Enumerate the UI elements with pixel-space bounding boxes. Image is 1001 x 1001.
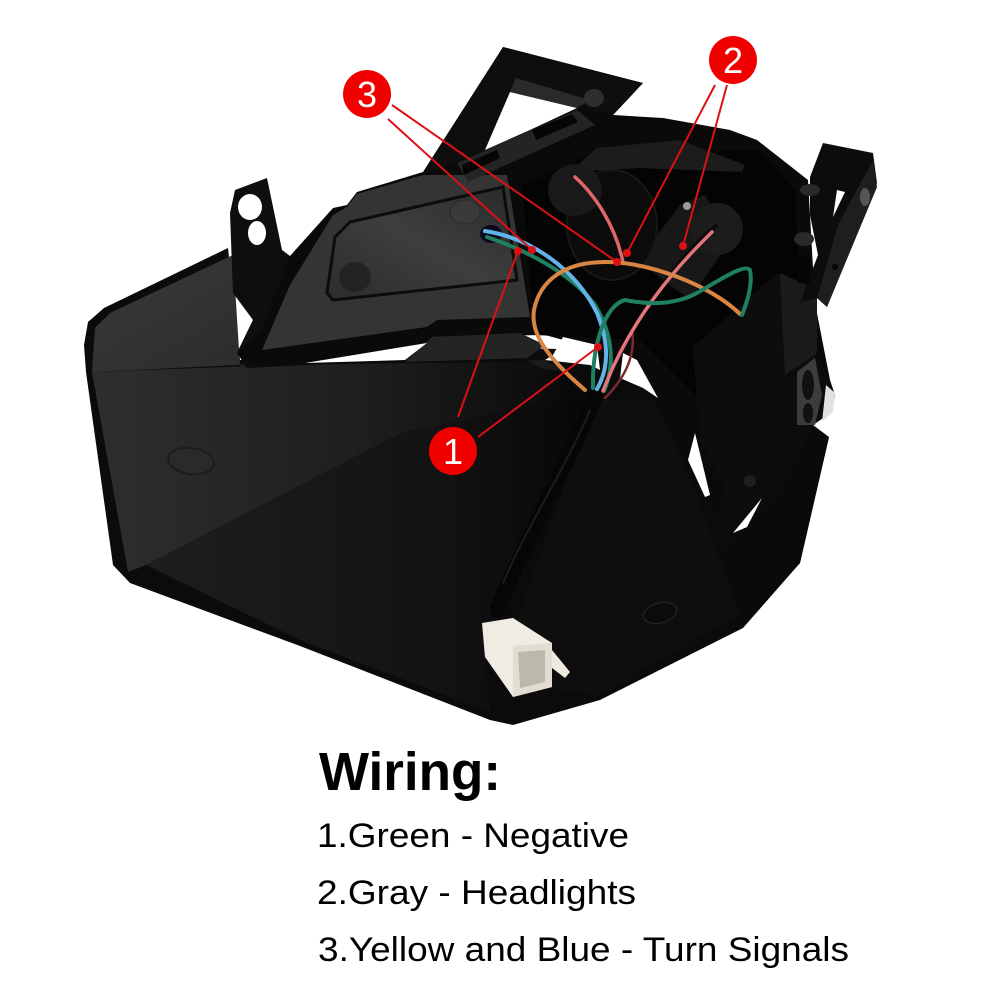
leader lines 2 [624, 85, 727, 256]
wire grommet hole [480, 225, 502, 243]
wiring cable [497, 398, 595, 610]
wire: pink lower [603, 232, 712, 391]
product: headlight housing [84, 47, 877, 725]
panel dimple right [641, 599, 679, 627]
left tray [262, 175, 530, 350]
badge 1: 1 [443, 431, 463, 472]
wire: pink upper [575, 177, 623, 262]
inset lens panel [327, 187, 517, 300]
wire: blue [485, 231, 606, 389]
leader lines 1 [458, 248, 601, 437]
black wing under wires [527, 360, 567, 372]
mounting plate [640, 195, 730, 300]
lower right plate [693, 273, 817, 510]
panel dimple lower [339, 262, 371, 292]
gray strip below tray [405, 333, 545, 362]
wire: orange [533, 262, 740, 390]
right arm bracket [713, 358, 835, 540]
callout 2 [624, 36, 757, 256]
leader lines 3 [388, 105, 620, 265]
wire: black [600, 226, 716, 392]
panel dimple left [166, 445, 216, 477]
legend line 2: 2.Gray - Headlights [317, 874, 636, 912]
badge 3: 3 [357, 74, 377, 115]
wire: dark red [605, 330, 633, 398]
right clip [800, 143, 877, 307]
badge 2 [709, 36, 757, 84]
white see-through gaps [305, 337, 762, 533]
panel dimple upper [450, 200, 480, 224]
rail [457, 110, 595, 182]
grommet right [691, 203, 743, 255]
heading: Wiring: [319, 742, 501, 802]
wire: green front [593, 268, 751, 388]
callout 3 [343, 70, 620, 265]
housing lower panel [84, 248, 829, 725]
callout 1 [429, 248, 601, 475]
legend line 3: 3.Yellow and Blue - Turn Signals [318, 931, 849, 969]
wiring legend [317, 742, 849, 969]
inner cavity [522, 150, 800, 400]
top plate inside housing [570, 140, 745, 172]
badge 1 [429, 427, 477, 475]
coloured wires [485, 177, 751, 398]
right side slots [794, 184, 820, 283]
upper housing [237, 47, 835, 540]
wire: green rear [487, 237, 611, 391]
badge 2: 2 [723, 40, 743, 81]
badge 3 [343, 70, 391, 118]
left bracket [230, 178, 290, 353]
grommet left [548, 164, 602, 216]
legend line 1: 1.Green - Negative [317, 817, 629, 855]
top tab with window [423, 47, 643, 175]
screw [683, 202, 691, 210]
connector plug [482, 618, 570, 697]
inner lens [567, 170, 657, 280]
